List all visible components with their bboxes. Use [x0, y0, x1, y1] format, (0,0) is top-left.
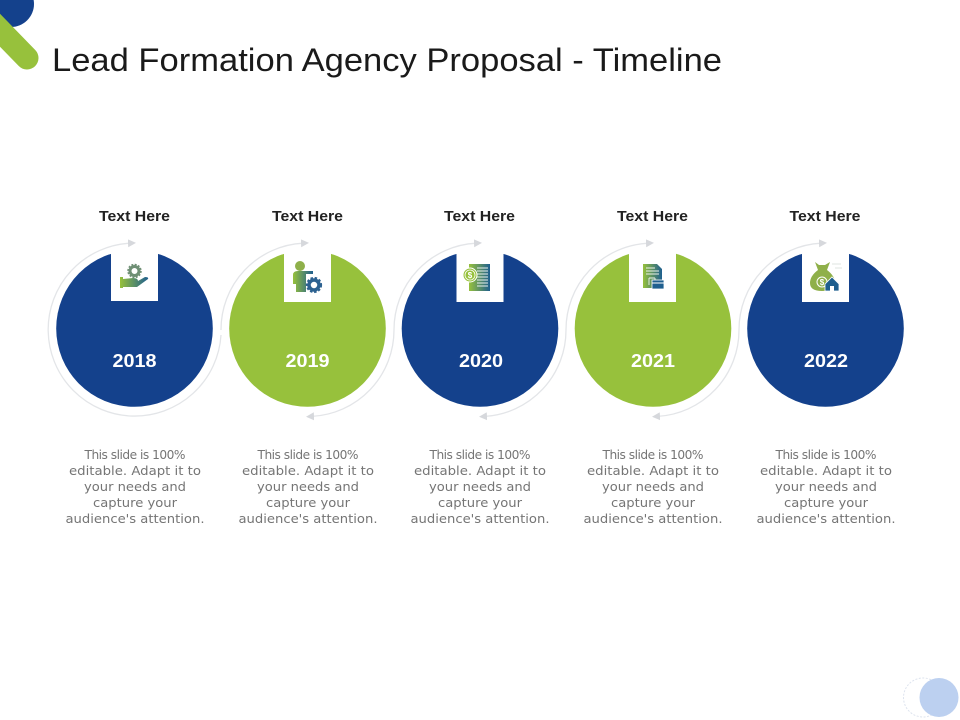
description: 2018: your needs and — [84, 480, 186, 494]
icon: hand with gear — [120, 264, 148, 288]
description: 2019: editable. Adapt it to — [242, 464, 374, 478]
description: 2019: capture your — [266, 496, 351, 510]
description: 2022: This slide is 100% — [774, 448, 876, 462]
year: 2018: 2018 — [112, 351, 156, 371]
year: 2019: 2019 — [286, 351, 330, 371]
circle: 2022 — [747, 250, 904, 407]
icon tile: 2019 — [284, 249, 331, 302]
arc arrow: 2022 ring — [739, 243, 821, 330]
year: 2021: 2021 — [631, 351, 675, 371]
column: 2021 — [566, 209, 739, 526]
column: 2020 — [394, 209, 566, 526]
icon: document with dollar coin — [463, 264, 490, 291]
description: 2020: audience's attention. — [410, 512, 550, 526]
description: 2021: audience's attention. — [584, 512, 722, 526]
heading: 2021: Text Here — [617, 209, 688, 225]
description: 2022: audience's attention. — [756, 512, 896, 526]
arc arrows: 2020 ring — [394, 243, 566, 416]
decoration: top-left logo shapes — [0, 0, 34, 58]
icon tile: 2021 — [629, 249, 676, 302]
description: 2022: editable. Adapt it to — [760, 464, 892, 478]
description: 2022: capture your — [784, 496, 869, 510]
icon tile: 2020 — [456, 249, 504, 302]
description: 2022: your needs and — [775, 480, 877, 494]
decoration: bottom-right circles — [904, 678, 958, 717]
description: 2021: your needs and — [602, 480, 704, 494]
arc arrows: 2019 ring — [221, 243, 394, 416]
icon: money bag with house — [810, 262, 842, 291]
description: 2020: This slide is 100% — [428, 448, 530, 462]
arc arrows: 2021 ring — [566, 243, 739, 416]
description: 2018: editable. Adapt it to — [69, 464, 201, 478]
description: 2018: audience's attention. — [66, 512, 204, 526]
icon tile: 2022 — [802, 249, 849, 302]
title: Lead Formation Agency Proposal - Timeline — [52, 42, 722, 78]
column: 2019 — [221, 209, 394, 526]
heading: 2018: Text Here — [99, 209, 170, 225]
icon: document with dollar coin: $ — [468, 271, 473, 280]
description: 2019: audience's attention. — [238, 512, 378, 526]
column: 2022 — [739, 209, 904, 526]
description: 2019: your needs and — [257, 480, 359, 494]
icon tile: 2018 — [111, 249, 158, 301]
circle: 2020 — [402, 250, 558, 407]
heading: 2020: Text Here — [444, 209, 515, 225]
heading: 2019: Text Here — [272, 209, 343, 225]
year: 2022: 2022 — [804, 351, 848, 371]
icon: money bag with house: $ — [820, 278, 825, 287]
circle: 2021 — [575, 250, 731, 407]
circle: 2018 — [56, 250, 213, 407]
description: 2018: This slide is 100% — [84, 448, 186, 462]
description: 2021: editable. Adapt it to — [587, 464, 719, 478]
arc arrow: 2018 ring — [48, 243, 221, 416]
icon: document with card — [643, 264, 664, 289]
description: 2021: capture your — [611, 496, 696, 510]
year: 2020: 2020 — [459, 351, 503, 371]
description: 2018: capture your — [93, 496, 178, 510]
icon: person with gear — [293, 261, 321, 292]
circle: 2019 — [229, 250, 386, 407]
description: 2019: This slide is 100% — [256, 448, 358, 462]
description: 2020: editable. Adapt it to — [414, 464, 546, 478]
description: 2020: capture your — [438, 496, 523, 510]
description: 2020: your needs and — [429, 480, 531, 494]
heading: 2022: Text Here — [790, 209, 860, 225]
description: 2021: This slide is 100% — [602, 448, 704, 462]
column: 2018 — [48, 209, 221, 526]
